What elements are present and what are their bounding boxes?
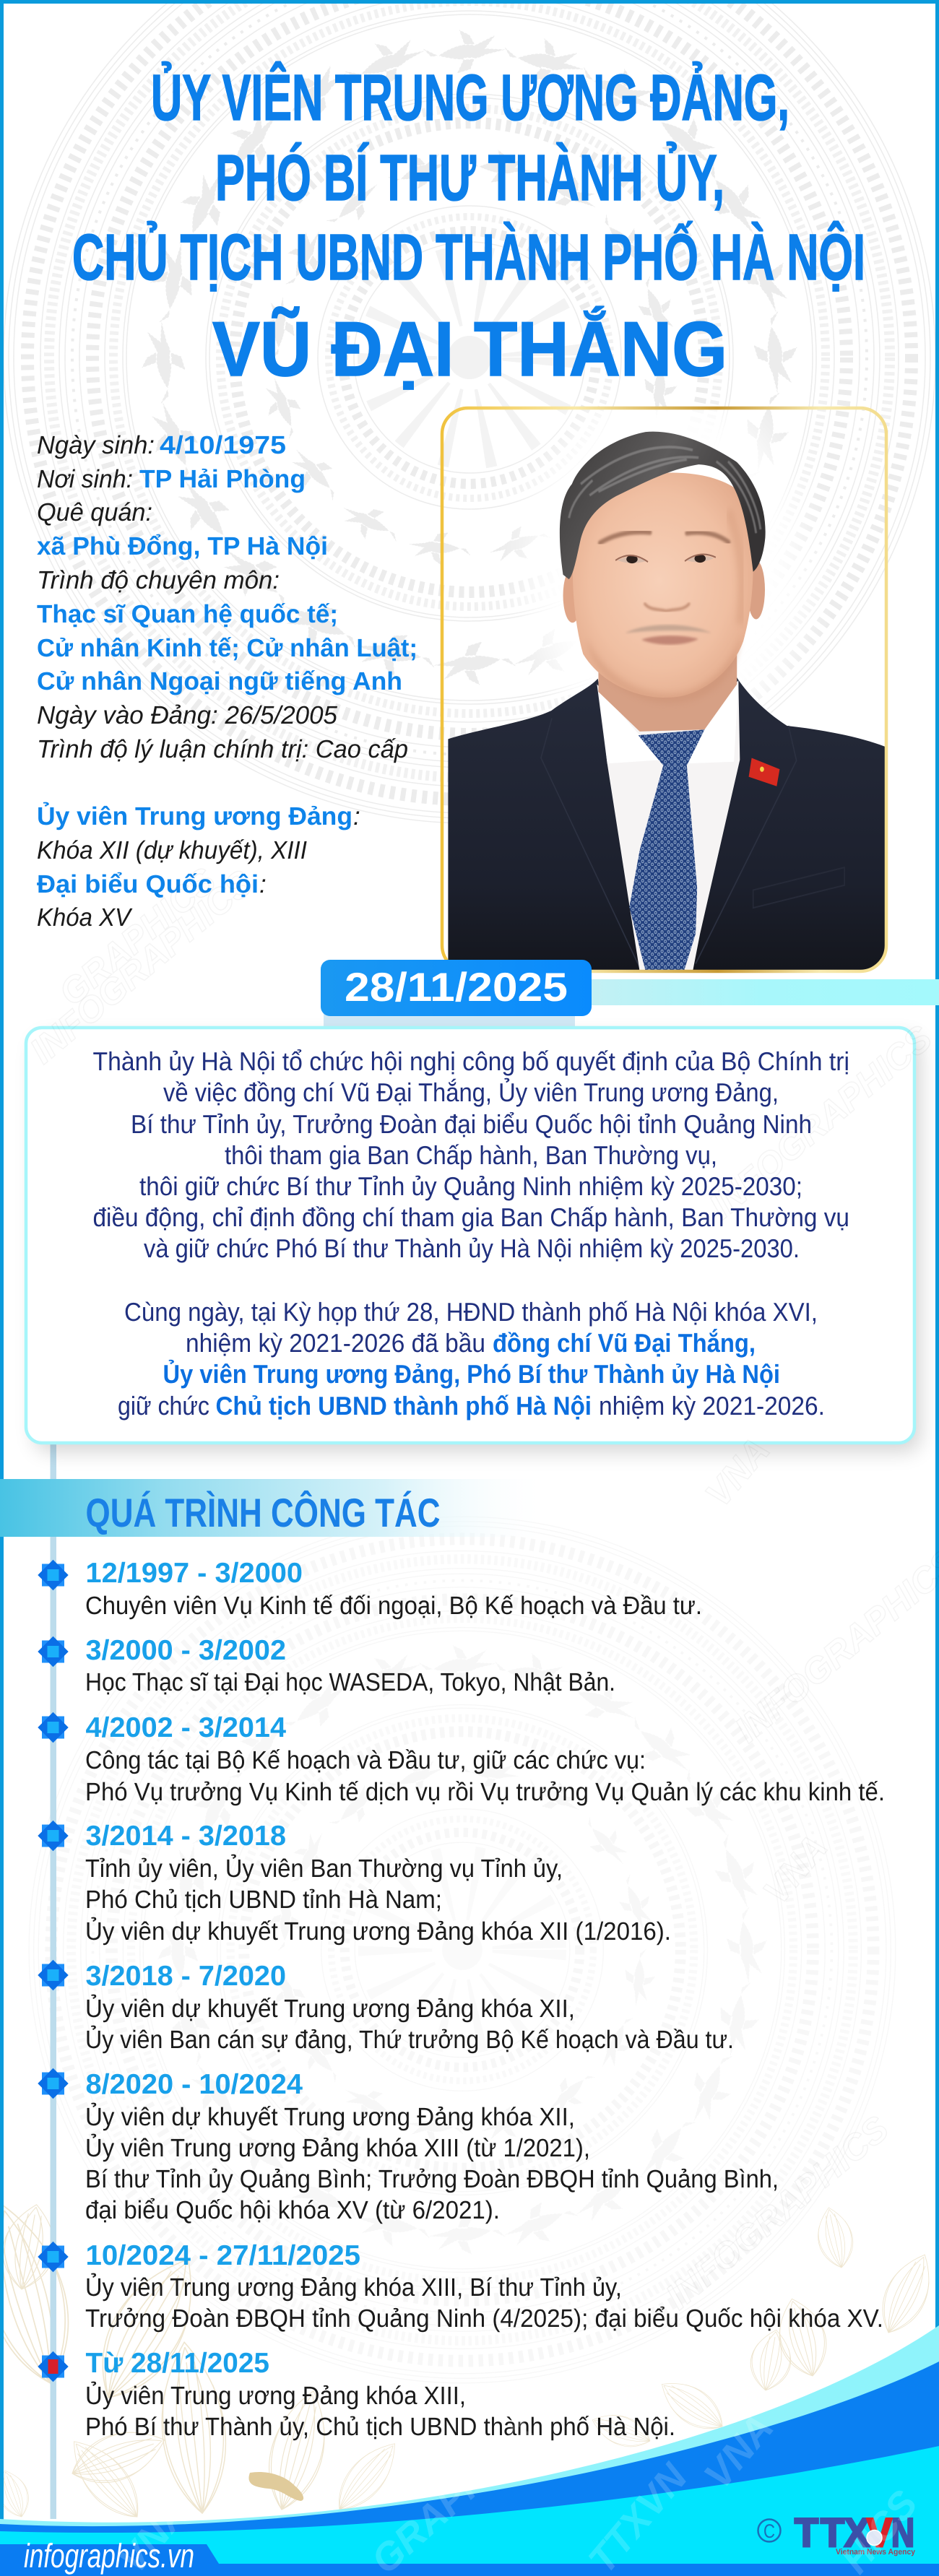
personal information block: xã Phù Đổng, TP Hà Nội [37,532,328,560]
agency letters: V [867,2510,892,2555]
personal information block: Ngày sinh: [37,431,155,459]
TTXVN logo [758,2510,916,2557]
personal information block: Quê quán: [37,498,152,526]
panel: news announcement [26,1028,914,1443]
footer wave: blue [0,2362,939,2576]
timeline item 5: Ủy viên dự khuyết Trung ương Đảng khóa XII, [85,1994,575,2023]
paragraph two: giữ chức [118,1391,209,1421]
paragraph one: và giữ chức Phó Bí thư Thành ủy Hà Nội nhiệm kỳ 2025-2030. [144,1233,800,1263]
paragraph one: thôi tham gia Ban Chấp hành, Ban Thường vụ, [225,1140,717,1170]
timeline item 6: 8/2020 - 10/2024 [85,2069,303,2100]
timeline item 2: Học Thạc sĩ tại Đại học WASEDA, Tokyo, Nhật Bản. [85,1668,615,1696]
timeline item 7 [38,2240,883,2333]
watermarks: GRAPHICS [51,860,223,1013]
paragraph two: đồng chí Vũ Đại Thắng, [493,1328,756,1358]
timeline item 8: current post: Ủy viên Trung ương Đảng khóa XIII, [85,2381,466,2410]
personal information block: : [353,802,360,831]
copyright mark [758,2519,780,2542]
timeline item 3: 4/2002 - 3/2014 [85,1712,286,1743]
agency tagline: Vietnam News Agency [836,2548,916,2557]
timeline item 5: Ủy viên Ban cán sự đảng, Thứ trưởng Bộ Kế hoạch và Đầu tư. [85,2025,734,2054]
timeline item 4: Ủy viên dự khuyết Trung ương Đảng khóa XII (1/2016). [85,1917,671,1946]
title [72,61,865,392]
watermarks: INFOGRAPHICS [658,2108,896,2317]
bronze drum pattern: top [4,0,935,823]
timeline item 2: 3/2000 - 3/2002 [85,1635,286,1666]
date pill [321,960,592,1016]
personal information block: 4/10/1975 [160,431,286,459]
personal information block: Khóa XV [37,903,133,932]
paragraph one [92,1046,849,1263]
personal information block: Khóa XII (dự khuyết), XIII [37,836,307,864]
paragraph two: Ủy viên Trung ương Đảng, Phó Bí thư Thành ủy Hà Nội [163,1359,780,1389]
portrait gold frame [442,408,886,971]
copyright mark: C [763,2520,775,2542]
timeline item 1 [38,1558,702,1620]
paragraph one: điều động, chỉ định đồng chí tham gia Ban Chấp hành, Ban Thường vụ [92,1202,849,1232]
agency letters: T [821,2510,844,2555]
personal information block: Cử nhân Kinh tế; Cử nhân Luật; [37,634,417,662]
timeline item 8: current post [38,2348,675,2441]
agency letters: N [891,2510,914,2555]
portrait: white glow behind head [528,410,805,700]
timeline item 5 [38,1960,734,2054]
globe [867,2531,882,2545]
timeline item 1: Chuyên viên Vụ Kinh tế đối ngoại, Bộ Kế hoạch và Đầu tư. [85,1592,702,1620]
watermarks: VNA [756,1827,835,1912]
agency letters: X [844,2510,870,2555]
timeline vertical line [51,1444,56,2519]
personal information block: : [259,870,267,898]
paragraph two: nhiệm kỳ 2021-2026. [599,1391,825,1421]
portrait: figure drawn in zoomed coordinates [448,432,885,971]
paragraph two: Chủ tịch UBND thành phố Hà Nội [215,1391,592,1421]
personal information block: Trình độ chuyên môn: [37,566,280,594]
paragraph one: Thành ủy Hà Nội tổ chức hội nghị công bố quyết định của Bộ Chính trị [92,1046,849,1076]
paragraph two: Cùng ngày, tại Kỳ họp thứ 28, HĐND thành phố Hà Nội khóa XVI, [124,1297,818,1327]
timeline item 7: Trưởng Đoàn ĐBQH tỉnh Quảng Ninh (4/2025); đại biểu Quốc hội khóa XV. [85,2304,883,2333]
timeline item 7: 10/2024 - 27/11/2025 [85,2240,360,2271]
timeline item 8: current post: Phó Bí thư Thành ủy, Chủ tịch UBND thành phố Hà Nội. [85,2413,675,2441]
personal information block: Đại biểu Quốc hội [37,870,259,898]
personal information block: Nơi sinh: [37,465,133,493]
timeline item 3 [38,1712,885,1806]
timeline item 2 [38,1635,615,1696]
watermarks [22,860,939,2576]
timeline item 4: Phó Chủ tịch UBND tỉnh Hà Nam; [85,1886,442,1914]
timeline item 6: Bí thư Tỉnh ủy Quảng Bình; Trưởng Đoàn ĐBQH tỉnh Quảng Bình, [85,2165,779,2193]
timeline item 3: Phó Vụ trưởng Vụ Kinh tế dịch vụ rồi Vụ trưởng Vụ Quản lý các khu kinh tế. [85,1778,885,1806]
timeline item 7: Ủy viên Trung ương Đảng khóa XIII, Bí thư Tỉnh ủy, [85,2273,622,2302]
timeline item 4 [38,1821,671,1946]
timeline item 6: đại biểu Quốc hội khóa XV (từ 6/2021). [85,2196,500,2224]
agency letters [795,2510,914,2555]
footer blue strip [0,2564,939,2576]
bronze drum pattern: lower [29,1517,896,2383]
timeline item 5: 3/2018 - 7/2020 [85,1961,286,1992]
personal information block: Thạc sĩ Quan hệ quốc tế; [37,600,338,628]
paragraph two [118,1297,825,1421]
personal information block: Ngày vào Đảng: 26/5/2005 [37,701,338,729]
timeline item 3: Công tác tại Bộ Kế hoạch và Đầu tư, giữ các chức vụ: [85,1746,646,1774]
personal information block: Ủy viên Trung ương Đảng [37,802,352,831]
watermarks: VNA [698,1430,777,1514]
lotus line art: right [587,2204,939,2455]
watermarks: VNA [696,2406,782,2497]
footer wave: light cyan edge [0,2325,939,2576]
timeline item 6: Ủy viên dự khuyết Trung ương Đảng khóa XII, [85,2102,575,2131]
timeline item 6 [38,2068,779,2224]
section header band: QUÁ TRÌNH CÔNG TÁC [85,1490,441,1535]
paragraph one: Bí thư Tỉnh ủy, Trưởng Đoàn đại biểu Quốc hội tỉnh Quảng Ninh [131,1109,812,1139]
footer wave: cyan [0,2446,939,2576]
news panel shadow [35,1037,920,1452]
date ribbon bar [585,979,939,1005]
paragraph two: nhiệm kỳ 2021-2026 đã bầu [186,1328,485,1358]
portrait photo [448,390,885,971]
section header band [0,1479,549,1537]
date pill: 28/11/2025 [345,964,568,1010]
timeline item 4: 3/2014 - 3/2018 [85,1821,286,1852]
paragraph one: về việc đồng chí Vũ Đại Thắng, Ủy viên Trung ương Đảng, [163,1077,779,1107]
watermarks: INFOGRAPHICS [22,862,261,1071]
paragraph one: thôi giữ chức Bí thư Tỉnh ủy Quảng Ninh nhiệm kỳ 2025-2030; [139,1171,802,1201]
timeline item 8: current post: Từ 28/11/2025 [85,2348,269,2379]
lotus line art: left [0,2195,408,2530]
personal information block [37,431,417,932]
watermarks: INFOGRAPHICS [701,1018,939,1226]
lotus seed pod [248,2472,303,2501]
timeline item 4: Tỉnh ủy viên, Ủy viên Ban Thường vụ Tỉnh ủy, [85,1854,563,1883]
title: VŨ ĐẠI THẮNG [212,305,727,392]
personal information block: Cử nhân Ngoại ngữ tiếng Anh [37,667,402,695]
shadow under date pill [324,1011,575,1028]
footer tab with site name: infographics.vn [24,2536,194,2575]
personal information block: TP Hải Phòng [139,465,306,493]
agency letters: T [795,2510,818,2555]
timeline item 1: 12/1997 - 3/2000 [85,1558,303,1589]
timeline item 6: Ủy viên Trung ương Đảng khóa XIII (từ 1/2021), [85,2133,590,2162]
personal information block: Trình độ lý luận chính trị: Cao cấp [37,735,408,763]
